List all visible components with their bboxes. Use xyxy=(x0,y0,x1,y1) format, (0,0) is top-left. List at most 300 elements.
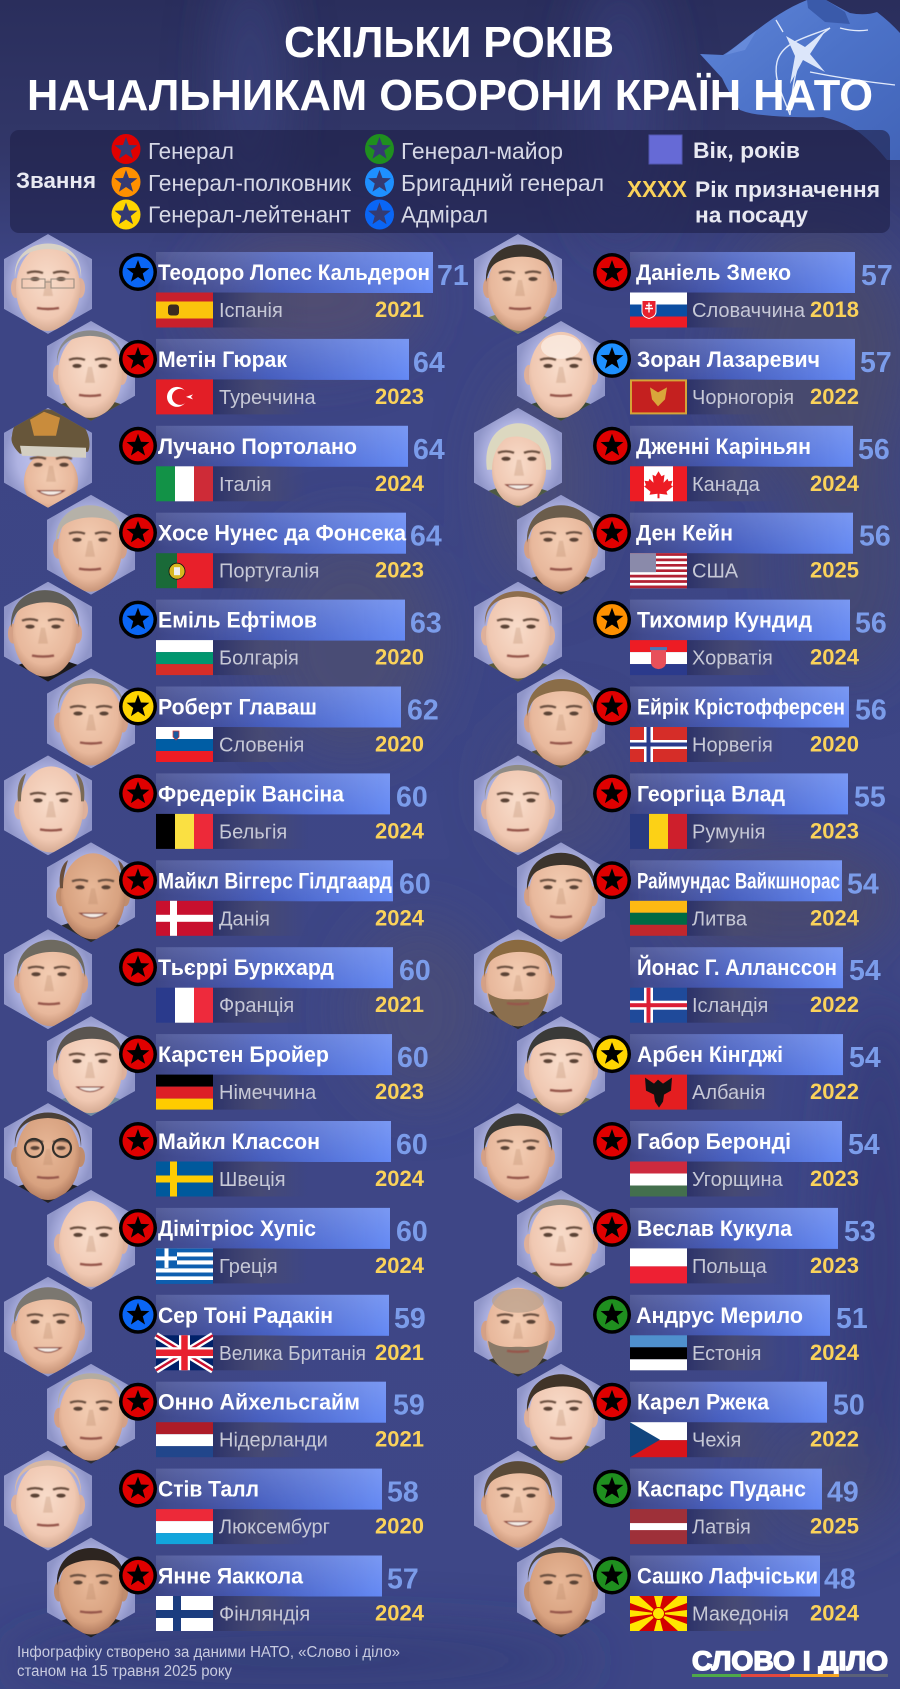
year: 2023 xyxy=(810,818,859,843)
age bar xyxy=(630,773,848,814)
year: 2023 xyxy=(375,1079,424,1104)
row: Кукула xyxy=(517,1190,876,1292)
rank badge xyxy=(119,1383,157,1421)
country xyxy=(687,1596,789,1631)
country xyxy=(213,640,308,675)
country: Словенія xyxy=(219,734,304,756)
age: 57 xyxy=(860,347,892,379)
row: Кейн xyxy=(517,495,891,597)
country xyxy=(687,466,782,501)
country: Болгарія xyxy=(219,648,299,670)
country xyxy=(687,1335,782,1370)
age bar xyxy=(630,1295,830,1336)
rank badge xyxy=(119,253,157,291)
country: Латвія xyxy=(692,1517,751,1539)
country xyxy=(213,1075,317,1110)
year: 2021 xyxy=(375,297,424,322)
rank badge xyxy=(119,601,157,639)
year: 2023 xyxy=(375,384,424,409)
flag: Spain xyxy=(156,292,213,328)
age: 60 xyxy=(396,1129,428,1161)
portrait xyxy=(517,321,605,423)
age bar xyxy=(630,426,853,467)
flag: Turkey xyxy=(156,379,213,414)
age bar xyxy=(156,513,406,554)
name: Карел Ржека xyxy=(637,1390,770,1415)
name: Раймундас Вайкшнорас xyxy=(637,868,840,893)
year: 2024 xyxy=(375,1253,425,1278)
country xyxy=(687,553,782,588)
row: Віггерс Гілдгаард xyxy=(47,842,431,944)
age bar xyxy=(630,860,842,901)
country: Фінляндія xyxy=(219,1604,310,1626)
rank badge xyxy=(593,1383,631,1421)
age bar xyxy=(156,252,433,293)
name: Майкл Классон xyxy=(158,1129,320,1154)
age bar xyxy=(630,339,855,380)
portrait xyxy=(47,1538,135,1640)
year: 2020 xyxy=(375,1514,424,1539)
name: Сер Тоні Радакін xyxy=(158,1303,333,1328)
age bar xyxy=(156,1382,386,1423)
footer source note xyxy=(17,1644,400,1680)
country: Швеція xyxy=(219,1169,286,1191)
country xyxy=(213,379,317,414)
country: Румунія xyxy=(692,821,765,843)
flag: Montenegro xyxy=(631,380,686,413)
portrait xyxy=(4,582,92,684)
flag: Latvia xyxy=(630,1509,687,1544)
portrait xyxy=(4,234,92,334)
age: 54 xyxy=(848,1129,880,1161)
portrait xyxy=(47,842,135,944)
name: Стів Талл xyxy=(158,1477,259,1502)
footer source note: Інфографіку створено за даними НАТО, «Слово і діло» xyxy=(17,1644,400,1661)
flag: Croatia xyxy=(630,640,687,675)
legend: lieutenant general: Генерал-лейтенант xyxy=(148,202,351,228)
rank badge xyxy=(593,1556,631,1594)
age bar xyxy=(156,1469,382,1510)
portrait xyxy=(4,929,92,1029)
rank badge xyxy=(593,427,631,465)
age bar xyxy=(630,1208,838,1249)
legend: admiral xyxy=(365,200,488,230)
rank badge xyxy=(119,340,157,378)
age bar xyxy=(630,1034,843,1075)
portrait xyxy=(517,495,605,597)
age: 54 xyxy=(849,1042,881,1074)
rank badge xyxy=(593,1209,631,1247)
row: Айхельсгайм xyxy=(47,1364,425,1466)
row: Кінгджі xyxy=(517,1016,881,1118)
age: 56 xyxy=(858,434,890,466)
age bar xyxy=(156,426,408,467)
name: Дженні Каріньян xyxy=(636,434,811,459)
NATO flag xyxy=(700,0,900,160)
year: 2024 xyxy=(810,905,860,930)
rank badge xyxy=(593,774,631,812)
year: 2020 xyxy=(375,732,424,756)
rank badge xyxy=(593,253,631,291)
flag: Bulgaria xyxy=(156,640,213,675)
rank badge xyxy=(119,1470,157,1508)
row: Гюрак xyxy=(47,321,445,423)
name: Онно Айхельсгайм xyxy=(158,1390,360,1415)
age: 50 xyxy=(833,1390,865,1422)
portrait xyxy=(47,321,135,423)
portrait xyxy=(474,582,562,684)
age bar xyxy=(630,513,853,554)
country xyxy=(213,1596,310,1631)
rank badge xyxy=(593,1035,631,1073)
name: Йонас Г. Алланссон xyxy=(637,955,837,980)
flag: Romania xyxy=(630,814,687,849)
age bar xyxy=(630,1556,820,1596)
age: 51 xyxy=(836,1303,868,1335)
age bar xyxy=(156,1034,392,1075)
row: Бройер xyxy=(47,1016,429,1118)
country: Албанія xyxy=(692,1082,765,1104)
rank badge xyxy=(119,427,157,465)
year: 2021 xyxy=(375,1340,424,1365)
year: 2025 xyxy=(810,1514,859,1539)
row: Влад xyxy=(474,755,886,855)
country xyxy=(687,1509,782,1544)
year: 2020 xyxy=(375,645,424,670)
flag: Netherlands xyxy=(156,1422,213,1457)
country xyxy=(687,1248,782,1283)
year: 2023 xyxy=(810,1166,859,1191)
country: Італія xyxy=(219,474,272,496)
flag: Belgium xyxy=(156,814,213,849)
flag: Lithuania xyxy=(630,901,687,936)
age: 56 xyxy=(855,694,887,726)
country: Люксембург xyxy=(219,1517,330,1539)
legend: appointment year: XXXX xyxy=(627,176,688,202)
portrait xyxy=(47,1190,135,1290)
flag: Albania xyxy=(630,1075,687,1110)
row: Радакін xyxy=(4,1277,426,1377)
row: Лопес Кальдерон xyxy=(4,234,469,334)
row: Змеко xyxy=(474,234,893,336)
age bar xyxy=(156,860,393,901)
age bar xyxy=(156,1295,389,1336)
rank badge xyxy=(119,1296,157,1334)
flag: USA xyxy=(630,553,687,588)
name: Ден Кейн xyxy=(636,521,733,546)
age: 60 xyxy=(396,781,428,813)
country: США xyxy=(692,561,739,583)
portrait xyxy=(4,1451,92,1551)
name: Каспарс Пуданс xyxy=(637,1477,806,1502)
legend: colonel general: Генерал-полковник xyxy=(148,170,352,196)
age: 63 xyxy=(410,608,442,640)
country: Туреччина xyxy=(219,387,317,409)
row: Пуданс xyxy=(474,1451,859,1551)
year: 2024 xyxy=(810,645,860,670)
legend: general: Генерал xyxy=(148,138,234,164)
flag: Denmark xyxy=(156,901,213,936)
year: 2025 xyxy=(810,558,859,583)
name: Зоран Лазаревич xyxy=(637,347,820,372)
age bar xyxy=(156,686,401,728)
year: 2023 xyxy=(810,1253,859,1278)
age: 54 xyxy=(849,955,881,987)
name: Георгіца Влад xyxy=(637,781,785,806)
age bar xyxy=(630,252,855,293)
row: Лафчіськи xyxy=(517,1538,860,1640)
country xyxy=(687,1422,782,1457)
year: 2018 xyxy=(810,297,859,322)
age bar xyxy=(630,947,843,988)
legend: appointment year: Рік призначення xyxy=(695,177,880,202)
flag: Germany xyxy=(156,1075,213,1110)
country xyxy=(687,814,782,849)
row: Кундид xyxy=(474,582,887,684)
year: 2024 xyxy=(810,1600,860,1626)
age: 60 xyxy=(399,955,431,987)
age bar xyxy=(630,1469,822,1510)
age bar xyxy=(156,947,393,988)
rank badge xyxy=(119,514,157,552)
flag: Norway xyxy=(630,727,687,762)
age: 71 xyxy=(437,260,469,292)
name: Арбен Кінгджі xyxy=(637,1042,783,1067)
country: Словаччина xyxy=(692,300,806,322)
portrait xyxy=(4,408,92,512)
year: 2022 xyxy=(810,1427,859,1452)
country xyxy=(213,727,308,762)
portrait xyxy=(517,1538,605,1640)
legend: age: Вік, років xyxy=(693,138,800,163)
country: Велика Британія xyxy=(219,1343,366,1365)
country: Данія xyxy=(219,908,270,930)
row: Талл xyxy=(4,1451,424,1551)
country: Бельгія xyxy=(219,821,287,843)
name: Метін Гюрак xyxy=(158,347,288,372)
country xyxy=(687,901,782,936)
age: 64 xyxy=(410,521,442,553)
year: 2024 xyxy=(375,818,425,843)
flag: Hungary xyxy=(630,1162,687,1196)
country xyxy=(213,1422,328,1457)
row: Классон xyxy=(4,1103,428,1205)
row: Яаккола xyxy=(47,1538,425,1640)
rank badge xyxy=(119,688,157,726)
rank badge xyxy=(593,1122,631,1160)
name: Еміль Ефтімов xyxy=(158,608,317,633)
year: 2021 xyxy=(375,1427,424,1452)
rank badge xyxy=(593,688,631,726)
country: Литва xyxy=(692,908,748,930)
country: Німеччина xyxy=(219,1082,317,1104)
title: СКІЛЬКИ РОКІВ xyxy=(284,18,614,67)
portrait xyxy=(517,1016,605,1118)
flag: Finland xyxy=(156,1596,213,1631)
age: 56 xyxy=(859,521,891,553)
portrait xyxy=(517,1190,605,1292)
country: Македонія xyxy=(692,1604,789,1626)
year: 2022 xyxy=(810,992,859,1017)
year: 2024 xyxy=(375,471,425,496)
name: Тьєррі Буркхард xyxy=(158,955,334,980)
flag: Greece xyxy=(156,1248,213,1283)
row: Крістофферсен xyxy=(517,668,887,770)
row: Нунес да Фонсека xyxy=(47,495,442,595)
age bar xyxy=(156,1121,391,1162)
name: Хосе Нунес да Фонсека xyxy=(158,521,407,546)
country: Нідерланди xyxy=(219,1430,328,1452)
age: 59 xyxy=(393,1390,425,1422)
country: Угорщина xyxy=(692,1169,784,1191)
country: Канада xyxy=(692,474,761,496)
flag: United Kingdom xyxy=(156,1335,213,1370)
age bar xyxy=(630,1382,827,1423)
age: 49 xyxy=(827,1477,859,1509)
portrait xyxy=(474,234,562,336)
country: Ісландія xyxy=(692,995,768,1017)
row: Портолано xyxy=(4,408,445,512)
portrait xyxy=(517,668,605,770)
row: Ржека xyxy=(517,1364,865,1466)
logo: СЛОВО І ДІЛО xyxy=(692,1646,888,1676)
portrait xyxy=(474,929,562,1031)
age: 60 xyxy=(399,868,431,900)
year: 2020 xyxy=(810,732,859,756)
flag: Czechia xyxy=(630,1422,687,1457)
country: Греція xyxy=(219,1256,278,1278)
legend panel xyxy=(10,130,890,233)
age: 60 xyxy=(396,1216,428,1248)
year: 2024 xyxy=(375,905,425,930)
country xyxy=(687,988,782,1023)
age: 60 xyxy=(397,1042,429,1074)
legend: brigadier general: Бригадний генерал xyxy=(401,170,604,196)
title xyxy=(27,18,873,120)
name: Лучано Портолано xyxy=(158,434,357,459)
portrait xyxy=(4,1103,92,1205)
country xyxy=(213,901,308,936)
portrait xyxy=(517,1364,605,1466)
country xyxy=(213,553,320,588)
name: Веслав Кукула xyxy=(637,1216,793,1241)
country: Польща xyxy=(692,1256,768,1278)
portrait xyxy=(474,408,562,510)
age: 59 xyxy=(394,1303,426,1335)
portrait xyxy=(4,755,92,855)
name: Даніель Змеко xyxy=(636,260,791,285)
rank badge xyxy=(593,861,631,899)
rank badge xyxy=(593,514,631,552)
name: Тихомир Кундид xyxy=(637,608,812,633)
age: 64 xyxy=(413,434,445,466)
year: 2024 xyxy=(810,471,860,496)
rank badge xyxy=(593,1296,631,1334)
row: Мерило xyxy=(474,1277,868,1379)
name: Майкл Віггерс Гілдгаард xyxy=(158,868,392,893)
name: Дімітріос Хупіс xyxy=(158,1216,316,1241)
country: Португалія xyxy=(219,561,320,583)
country xyxy=(213,1509,330,1544)
age bar xyxy=(156,600,405,641)
country: Норвегія xyxy=(692,734,773,756)
age: 48 xyxy=(824,1564,856,1596)
year: 2022 xyxy=(810,1079,859,1104)
flag: Estonia xyxy=(630,1335,687,1370)
age: 54 xyxy=(847,868,879,900)
flag: North Macedonia xyxy=(630,1596,687,1631)
portrait xyxy=(47,1016,135,1118)
name: Фредерік Вансіна xyxy=(158,781,345,806)
portrait xyxy=(47,1364,135,1466)
footer source note: станом на 15 травня 2025 року xyxy=(17,1663,232,1680)
name: Янне Яаккола xyxy=(158,1564,304,1588)
name: Сашко Лафчіськи xyxy=(637,1564,818,1588)
legend: appointment year: на посаду xyxy=(695,202,809,228)
age: 57 xyxy=(861,260,893,292)
row: Ефтімов xyxy=(4,582,442,684)
portrait xyxy=(47,668,135,768)
country: Чорногорія xyxy=(692,387,794,409)
country xyxy=(687,640,782,675)
flag: Slovenia xyxy=(156,727,213,762)
rank badge xyxy=(593,340,631,378)
rank badge xyxy=(119,1035,157,1073)
row: Вансіна xyxy=(4,755,428,855)
country xyxy=(687,292,806,328)
country: Франція xyxy=(219,995,294,1017)
country xyxy=(687,379,794,414)
rank badge xyxy=(119,861,157,899)
row: Хупіс xyxy=(47,1190,428,1290)
row: Главаш xyxy=(47,668,439,768)
age bar xyxy=(630,600,850,641)
rank badge xyxy=(593,1470,631,1508)
age bar xyxy=(630,686,849,728)
flag: Poland xyxy=(630,1248,687,1283)
year: 2022 xyxy=(810,384,859,409)
portrait xyxy=(474,1451,562,1551)
row: Лазаревич xyxy=(517,321,892,423)
country: Чехія xyxy=(692,1430,741,1452)
age bar xyxy=(156,1556,382,1596)
country: Естонія xyxy=(692,1343,762,1365)
flag: Italy xyxy=(156,466,213,501)
country: Іспанія xyxy=(219,300,283,322)
rank badge xyxy=(119,948,157,986)
portrait xyxy=(474,755,562,855)
legend: admiral: Адмірал xyxy=(401,202,488,228)
age: 57 xyxy=(387,1564,419,1596)
age bar xyxy=(156,1208,390,1249)
name: Карстен Бройер xyxy=(158,1042,329,1067)
name: Габор Беронді xyxy=(637,1129,791,1154)
flag: Sweden xyxy=(156,1162,213,1196)
country: Хорватія xyxy=(692,648,773,670)
rank badge xyxy=(119,1556,157,1594)
year: 2021 xyxy=(375,992,424,1017)
country xyxy=(213,1162,308,1196)
row: Беронді xyxy=(474,1103,880,1203)
name: Роберт Главаш xyxy=(158,694,317,720)
portrait xyxy=(474,1277,562,1379)
flag: Luxembourg xyxy=(156,1509,213,1544)
legend: major general: Генерал-майор xyxy=(401,138,563,164)
year: 2024 xyxy=(375,1600,425,1626)
name: Теодоро Лопес Кальдерон xyxy=(158,260,430,285)
row: Буркхард xyxy=(4,929,431,1029)
name: Андрус Мерило xyxy=(636,1303,803,1328)
